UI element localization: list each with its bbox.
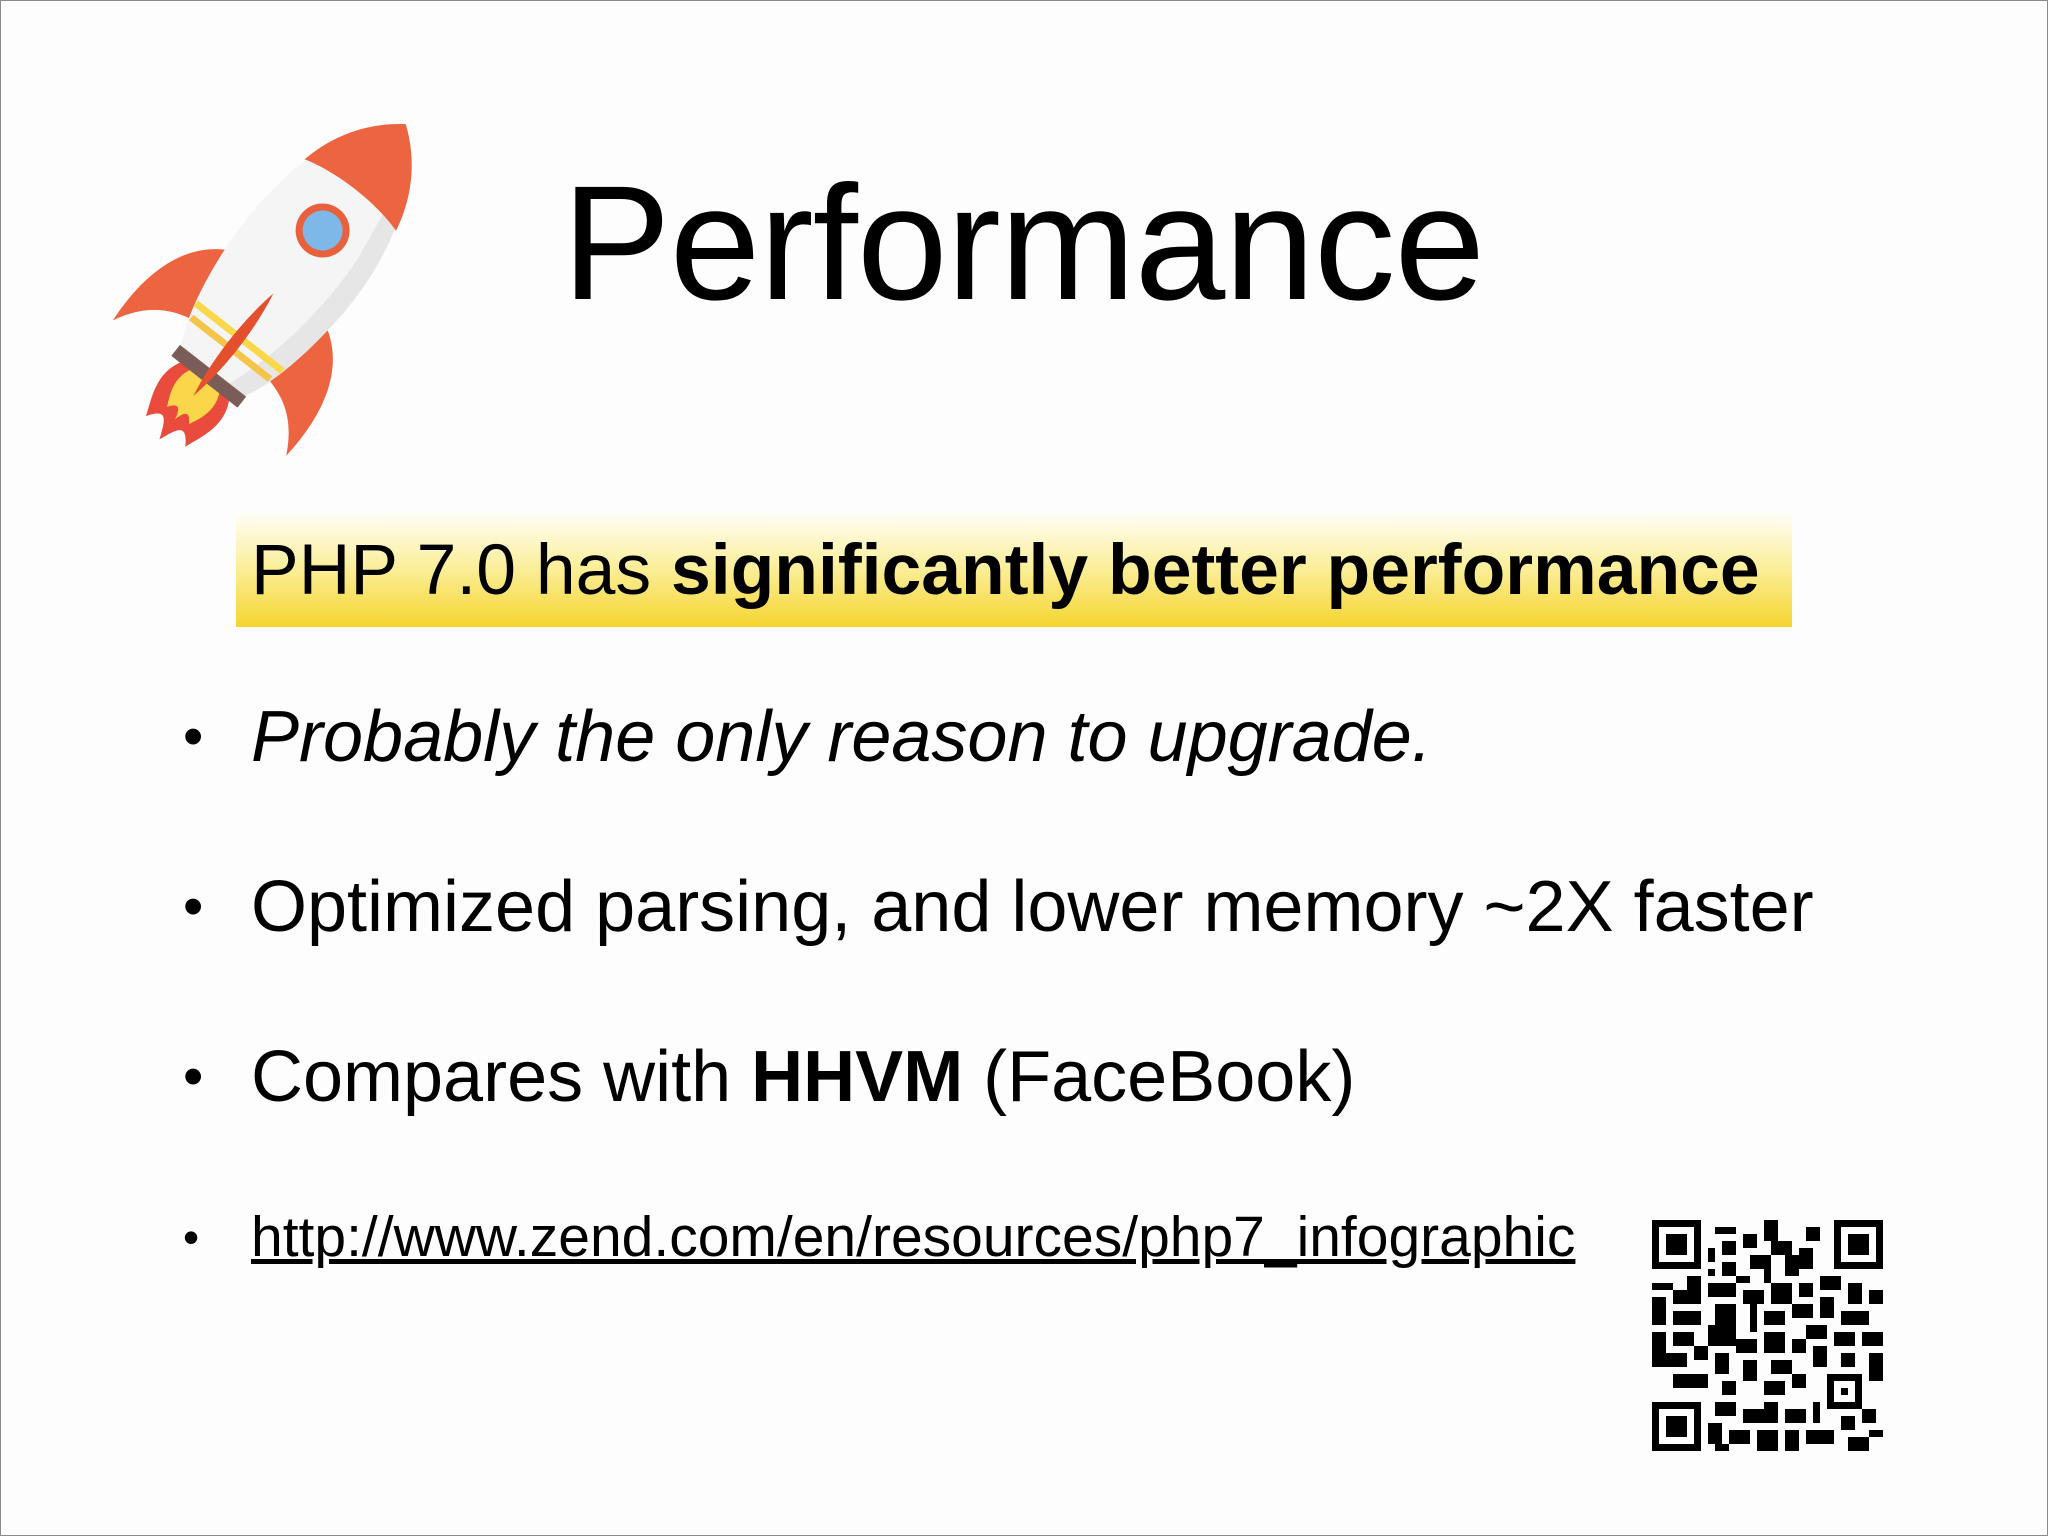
text: Probably the only reason to upgrade.: [251, 697, 1432, 777]
title: Performance: [562, 151, 1484, 334]
text: •: [183, 1044, 203, 1109]
left fin: [112, 217, 244, 360]
QR code: [1652, 1220, 1883, 1451]
bullet 3: [183, 1037, 1355, 1117]
text: •: [183, 1211, 199, 1263]
window: [285, 193, 361, 268]
text: •: [183, 874, 203, 939]
right fin: [235, 313, 367, 456]
body: [159, 83, 458, 413]
icon: rocket: [112, 124, 412, 456]
text: Compares with HHVM (FaceBook): [251, 1037, 1355, 1117]
bullet 1: [183, 697, 1432, 777]
bullet 4: link: [183, 1205, 1576, 1269]
flame: [131, 358, 234, 462]
stripes: [194, 301, 285, 374]
bullet 2: [183, 867, 1814, 947]
text: http://www.zend.com/en/resources/php7_infographic: [251, 1205, 1575, 1269]
base: [171, 345, 246, 408]
highlight bar: [236, 513, 1792, 627]
nose: [305, 88, 451, 231]
text: Optimized parsing, and lower memory ~2X faster: [251, 867, 1814, 947]
highlight bar: PHP 7.0 has significantly better performance: [251, 530, 1760, 610]
center fin: [189, 290, 278, 400]
text: •: [183, 704, 203, 769]
